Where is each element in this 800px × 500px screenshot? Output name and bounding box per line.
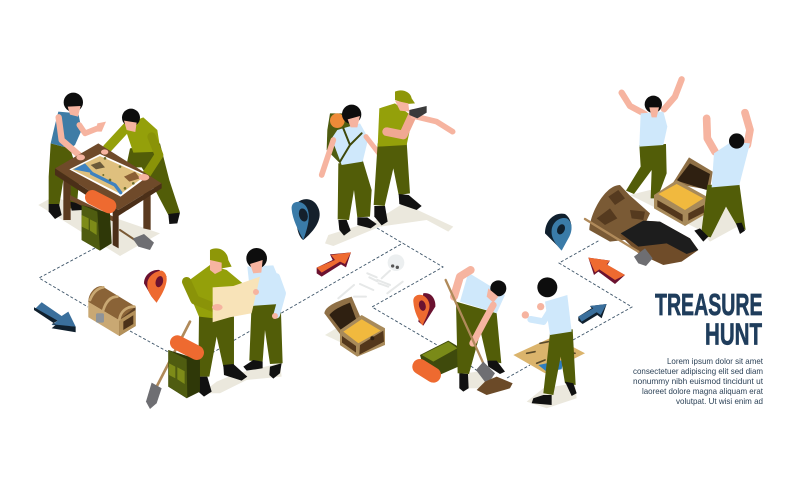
backpack with orange roll bbox=[82, 197, 112, 251]
ground shadow bbox=[202, 363, 282, 393]
cheering man bbox=[694, 113, 750, 242]
woman with light blue shirt bbox=[243, 248, 285, 379]
dirt mound bbox=[589, 185, 650, 242]
ground shadow bbox=[38, 197, 160, 256]
ground shadow bbox=[527, 383, 577, 408]
hands bbox=[212, 289, 259, 311]
arrow: blue left bbox=[34, 302, 76, 332]
map pin: dark blue bbox=[545, 214, 572, 251]
dashed route lines bbox=[39, 228, 632, 378]
man in olive shirt bbox=[107, 109, 180, 224]
description text: consectetuer adipiscing elit sed diam bbox=[633, 366, 763, 376]
backpack with orange roll bbox=[168, 343, 200, 398]
hands on table bbox=[76, 149, 149, 181]
map pin: red bbox=[144, 270, 167, 303]
shovel bbox=[120, 230, 154, 250]
cheering woman bbox=[622, 79, 682, 198]
shovel by the hole bbox=[585, 219, 653, 266]
ground shadow bbox=[325, 203, 453, 246]
man with cap bbox=[185, 248, 247, 397]
title bbox=[655, 287, 762, 352]
scene: celebrating at the dig site bbox=[585, 79, 750, 266]
arrow: orange up left bbox=[588, 258, 625, 284]
skeleton bbox=[338, 254, 404, 298]
open chest with gold bbox=[654, 157, 713, 226]
ground shadow bbox=[630, 190, 743, 242]
open treasure chest bbox=[324, 297, 385, 357]
arrow: orange up right bbox=[317, 252, 351, 277]
scene: man and woman reading map bbox=[146, 248, 285, 409]
scene: planning at the table bbox=[38, 93, 180, 256]
map pin: blue bbox=[292, 199, 320, 240]
description text: nonummy nibh euismod tincidunt ut bbox=[633, 376, 764, 386]
standing person bbox=[522, 277, 577, 405]
digging man bbox=[446, 270, 513, 395]
shovel with handle bbox=[146, 322, 190, 409]
description text: Lorem ipsum dolor sit amet bbox=[667, 356, 764, 366]
description text: laoreet dolore magna aliquam erat bbox=[642, 386, 764, 396]
description text bbox=[633, 356, 764, 406]
woman with backpack bbox=[322, 105, 386, 236]
scene: woman and man discussing map bbox=[513, 277, 585, 408]
closed treasure chest bbox=[88, 286, 136, 336]
arrow: blue up right bbox=[578, 304, 607, 324]
backpack lying with roll bbox=[420, 341, 458, 375]
treasure map on ground bbox=[513, 337, 585, 373]
scene: man with binoculars and woman bbox=[322, 90, 453, 246]
woman in blue top bbox=[49, 93, 106, 219]
dug hole bbox=[620, 221, 698, 265]
table with map bbox=[55, 143, 162, 248]
description text: volutpat. Ut wisi enim ad bbox=[676, 396, 763, 406]
paper map held bbox=[213, 277, 260, 322]
man with binoculars bbox=[374, 90, 453, 225]
title: HUNT bbox=[705, 316, 762, 352]
map pin: orange bbox=[413, 293, 435, 326]
